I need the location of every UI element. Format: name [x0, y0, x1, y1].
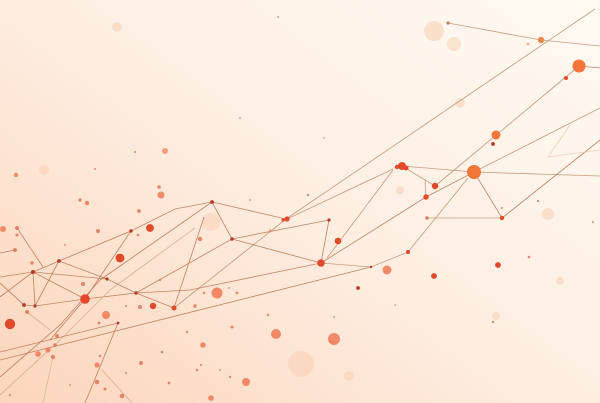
large orange nodes: [467, 37, 586, 179]
pale bokeh circles: [39, 21, 564, 381]
small dark junctions: [22, 21, 495, 324]
salmon medium dots: [0, 148, 392, 401]
red cluster and main nodes: [5, 76, 568, 329]
